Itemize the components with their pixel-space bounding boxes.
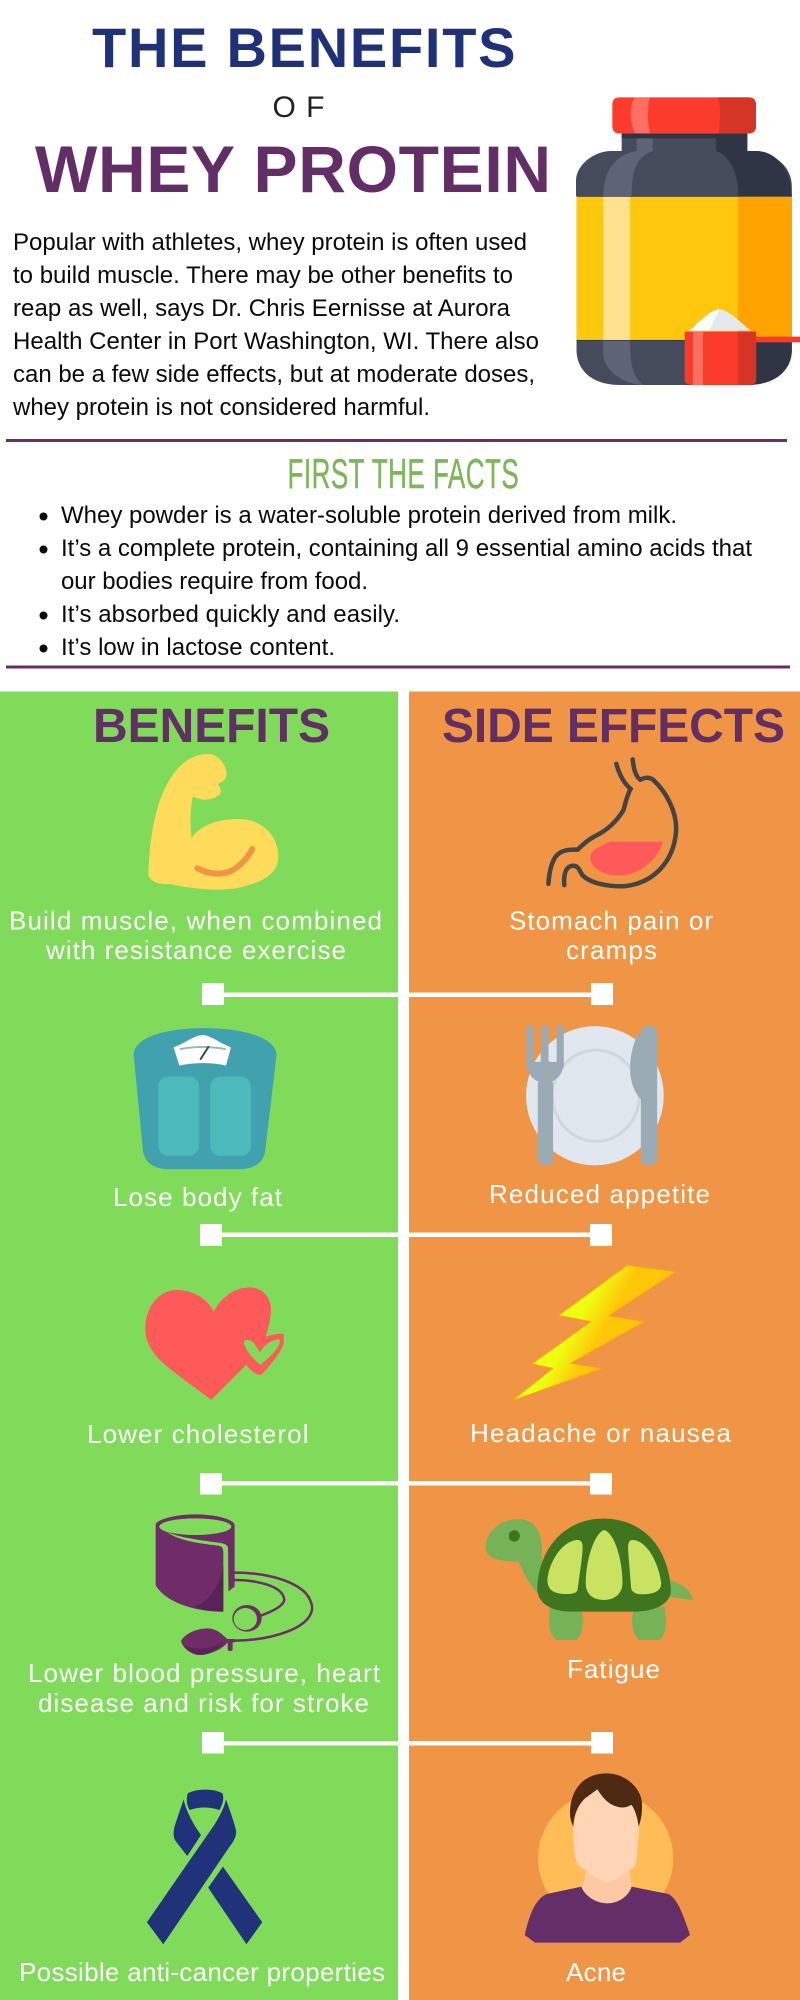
icon: protein jar with scoop: [576, 97, 800, 385]
intro paragraph: Health Center in Port Washington, WI. There also: [13, 328, 539, 355]
heading: first the facts: FIRST THE FACTS: [288, 451, 519, 498]
connector 3: [200, 1473, 612, 1494]
connector 2: [200, 1224, 612, 1246]
connector 1: [202, 983, 613, 1005]
label: lower blood pressure: Lower blood pressure, heart: [28, 1658, 381, 1688]
facts bullet list: our bodies require from food.: [61, 568, 368, 595]
intro paragraph: reap as well, says Dr. Chris Eernisse at Aurora: [13, 295, 511, 322]
facts bullet list: It’s absorbed quickly and easily.: [61, 601, 400, 628]
title: of: OF: [272, 91, 324, 124]
label: lower cholesterol: Lower cholesterol: [87, 1419, 308, 1449]
intro paragraph: [12, 229, 539, 421]
label: lower blood pressure: [28, 1658, 381, 1718]
icon: awareness ribbon: [147, 1790, 262, 1944]
label: stomach pain: Stomach pain or: [509, 906, 713, 936]
intro paragraph: to build muscle. There may be other benefits to: [13, 262, 513, 289]
title: whey protein: WHEY PROTEIN: [35, 132, 551, 206]
label: build muscle: Build muscle, when combined: [9, 906, 382, 936]
label: lower blood pressure: disease and risk for stroke: [38, 1688, 369, 1718]
title: the benefits: THE BENEFITS: [92, 16, 516, 79]
facts bullet list: It’s a complete protein, containing all 9 essential amino acids that: [61, 535, 752, 562]
label: headache: Headache or nausea: [470, 1418, 732, 1448]
label: build muscle: with resistance exercise: [45, 935, 346, 965]
icon: plate with fork and knife: [526, 1025, 664, 1165]
label: stomach pain: cramps: [566, 935, 657, 965]
label: build muscle: [9, 906, 382, 965]
connector 4: [202, 1732, 613, 1754]
facts bullet list: [40, 502, 752, 661]
intro paragraph: Popular with athletes, whey protein is often used: [13, 229, 527, 256]
label: anti-cancer: Possible anti-cancer properties: [19, 1957, 385, 1987]
panel: benefits: [0, 692, 398, 2000]
icon: heart: [145, 1287, 284, 1400]
icon: stomach: [548, 759, 676, 886]
icon: lightning bolt: [512, 1265, 676, 1401]
icon: person with acne: [525, 1773, 690, 1943]
intro paragraph: whey protein is not considered harmful.: [12, 394, 430, 421]
icon: turtle: [486, 1519, 693, 1640]
icon: blood pressure cuff: [156, 1514, 312, 1655]
label: reduced appetite: Reduced appetite: [489, 1179, 710, 1209]
label: stomach pain: [509, 906, 713, 965]
panel: side effects: [409, 692, 800, 2000]
facts bullet list: Whey powder is a water-soluble protein derived from milk.: [61, 502, 677, 529]
icon: flexed muscle: [148, 754, 278, 890]
label: acne: Acne: [566, 1957, 626, 1987]
facts bullet list: It’s low in lactose content.: [61, 634, 335, 661]
icon: bathroom scale: [134, 1028, 277, 1169]
label: fatigue: Fatigue: [567, 1654, 660, 1684]
label: lose body fat: Lose body fat: [113, 1182, 283, 1212]
heading: benefits: BENEFITS: [93, 700, 330, 753]
intro paragraph: can be a few side effects, but at moderate doses,: [13, 361, 535, 388]
heading: side effects: SIDE EFFECTS: [442, 700, 785, 753]
